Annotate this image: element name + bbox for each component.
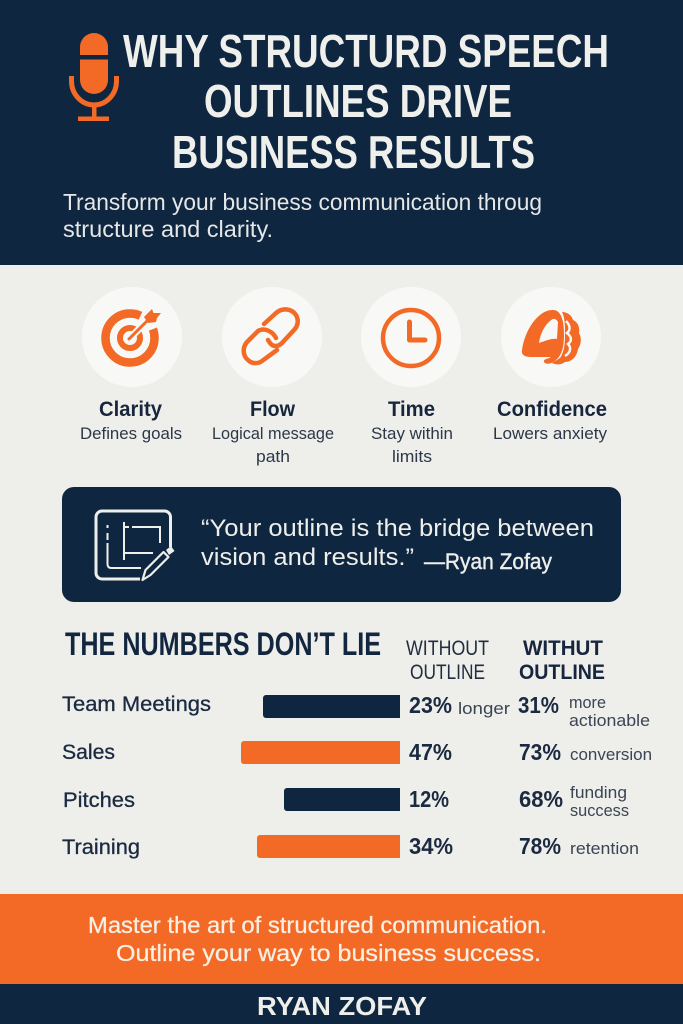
call to action band: Master the art of structured communication.: [88, 912, 547, 938]
row: training: 78%: [519, 833, 561, 859]
row: team meetings: Team Meetings: [62, 693, 211, 716]
benefit: clarity: [80, 287, 182, 443]
row: team meetings: [62, 692, 650, 730]
row: pitches: funding: [570, 783, 627, 802]
icon: outline blueprint and pencil: [96, 511, 174, 580]
description: Defines goals: [80, 425, 182, 443]
row: team meetings: 23%: [409, 692, 452, 718]
icon: brain: [522, 310, 581, 364]
call to action band: Outline your way to business success.: [116, 940, 541, 966]
row: team meetings: 31%: [518, 692, 559, 718]
row: sales: 73%: [519, 739, 561, 765]
icon: chain link: [244, 309, 298, 363]
title: OUTLINES DRIVE: [204, 75, 512, 127]
description: limits: [392, 448, 432, 466]
description: [212, 425, 334, 466]
description: Logical message: [212, 425, 334, 443]
quote text: [201, 515, 594, 574]
bar: [263, 695, 400, 718]
column heading: without outline: [406, 637, 489, 684]
row: training: retention: [570, 839, 639, 858]
benefit: time: [361, 287, 461, 466]
row: sales: conversion: [570, 745, 652, 764]
quote panel: [62, 487, 621, 602]
row: pitches: 12%: [409, 786, 449, 812]
label: Time: [388, 398, 435, 421]
row: training: 34%: [409, 833, 453, 859]
benefit: flow: [212, 287, 334, 466]
quote text: vision and results.”: [201, 544, 414, 571]
label: Flow: [250, 398, 296, 421]
description: Lowers anxiety: [493, 425, 608, 443]
description: path: [256, 448, 290, 466]
quote text: “Your outline is the bridge between: [201, 515, 594, 542]
title: [123, 25, 609, 178]
call to action band: [0, 894, 683, 984]
row: sales: Sales: [62, 741, 115, 764]
column heading: without outline: OUTLINE: [410, 661, 485, 684]
footer band: RYAN ZOFAY: [257, 993, 427, 1021]
row: training: Training: [62, 836, 140, 859]
label: Clarity: [99, 398, 162, 421]
bar: [257, 835, 400, 858]
column heading: with outline: OUTLINE: [519, 661, 605, 684]
row: sales: 47%: [409, 739, 452, 765]
section heading: THE NUMBERS DON’T LIE: [65, 626, 381, 662]
row: team meetings: actionable: [569, 711, 650, 730]
subtitle: structure and clarity.: [63, 216, 273, 242]
subtitle: Transform your business communication throug: [63, 189, 542, 215]
row: training: [62, 833, 639, 859]
benefit: confidence: [493, 287, 608, 443]
header panel: [0, 0, 683, 265]
column heading: without outline: WITHOUT: [406, 637, 489, 660]
label: Confidence: [497, 398, 607, 421]
title: BUSINESS RESULTS: [172, 126, 535, 178]
column heading: with outline: WITHUT: [523, 637, 603, 660]
row: pitches: Pitches: [63, 789, 135, 812]
row: team meetings: longer: [458, 699, 510, 718]
row: pitches: success: [570, 801, 629, 820]
subtitle: [63, 189, 542, 242]
row: pitches: 68%: [519, 786, 563, 812]
footer band: [0, 984, 683, 1024]
icon: clock: [383, 310, 439, 366]
row: team meetings: more: [569, 693, 606, 712]
quote text: —Ryan Zofay: [424, 549, 552, 574]
row: pitches: [63, 783, 629, 820]
column heading: with outline: [519, 637, 605, 684]
description: [371, 425, 453, 466]
icon: microphone: [72, 33, 116, 121]
description: Stay within: [371, 425, 453, 443]
row: sales: [62, 739, 652, 765]
icon: target: [106, 304, 166, 362]
bar: [241, 741, 400, 764]
bar: [284, 788, 400, 811]
